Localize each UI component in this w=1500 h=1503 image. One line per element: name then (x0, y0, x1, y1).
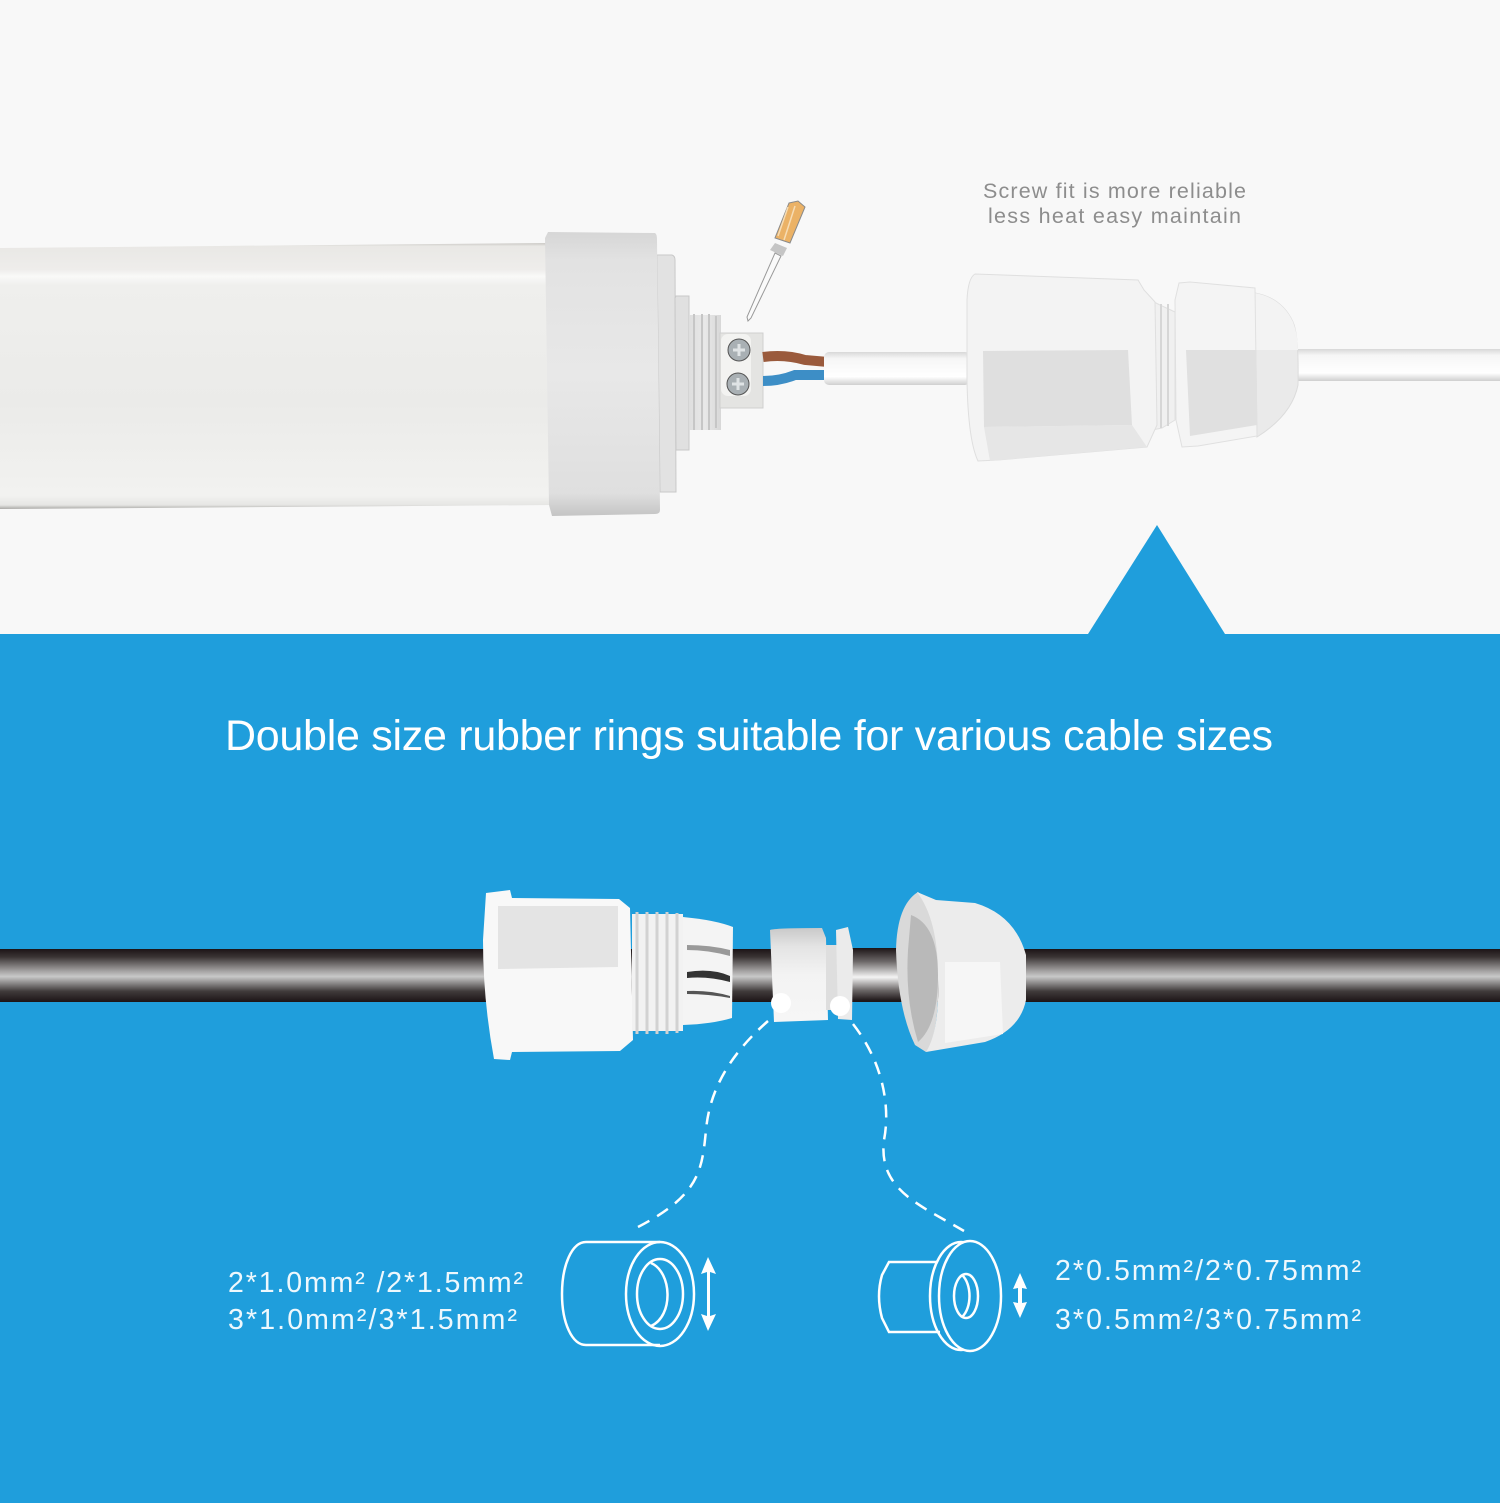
dome nut (896, 892, 1026, 1052)
screwdriver icon (747, 201, 805, 321)
icon: large bore rubber ring (562, 1242, 694, 1346)
white cable, left of nut (824, 352, 970, 385)
icon: small size double arrow (1013, 1273, 1027, 1318)
brown and blue wires (763, 356, 828, 381)
white cable, right of nut (1290, 349, 1500, 381)
left size label (228, 1267, 523, 1336)
terminal block with screws (720, 333, 763, 408)
caption: screw fit: Screw fit is more reliable (983, 179, 1246, 203)
right size label (1055, 1255, 1361, 1336)
heading: Double size rubber rings suitable for various cable sizes (225, 712, 1273, 760)
caption: screw fit: less heat easy maintain (988, 204, 1241, 228)
LED tube fixture with end cap (0, 232, 721, 516)
left gland body with thread and fingers (483, 890, 733, 1060)
left size label: 2*1.0mm² /2*1.5mm² (228, 1267, 523, 1299)
right size label: 2*0.5mm²/2*0.75mm² (1055, 1255, 1361, 1287)
icon: large size double arrow (701, 1257, 716, 1331)
dashed connector lines (638, 1021, 964, 1231)
black cable (0, 948, 1500, 1002)
top background panel (0, 0, 1500, 634)
rubber ring insert (770, 927, 853, 1022)
assembled cable gland (967, 274, 1298, 461)
left size label: 3*1.0mm²/3*1.5mm² (228, 1304, 517, 1336)
icon: small bore rubber ring (879, 1241, 1001, 1351)
right size label: 3*0.5mm²/3*0.75mm² (1055, 1304, 1361, 1336)
blue panel (0, 525, 1500, 1503)
caption: screw fit (983, 179, 1246, 228)
